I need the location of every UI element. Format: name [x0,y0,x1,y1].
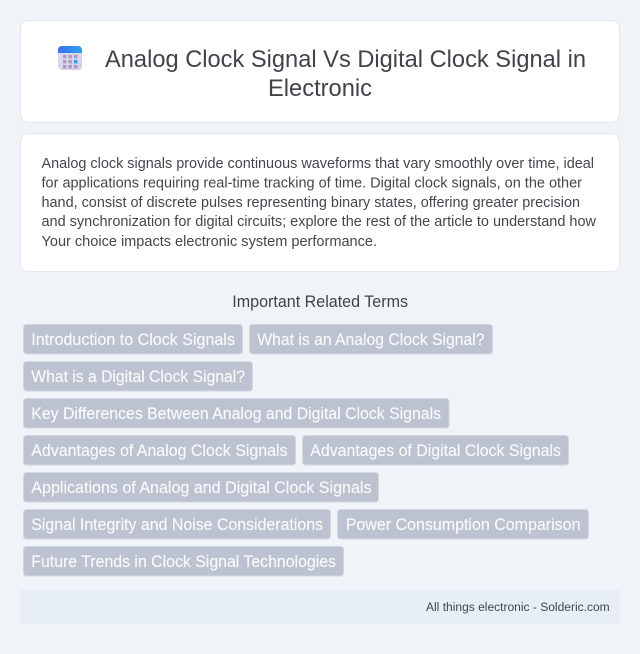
intro paragraph: Analog clock signals provide continuous waveforms that vary smoothly over time, ideal [42,156,594,172]
tag: future trends: Future Trends in Clock Signal Technologies [31,553,336,571]
tag: key differences: Key Differences Between Analog and Digital Clock Signals [31,405,441,423]
tag: signal integrity [24,510,330,539]
panel: title card [20,20,620,122]
icon: calendar [58,46,82,70]
tag: digital definition [24,362,252,391]
tag list [24,324,588,576]
footer [20,590,620,624]
title: Analog Clock Signal Vs Digital Clock Signal in [105,46,586,73]
tag: applications [24,472,378,502]
intro paragraph: for applications requiring real-time tracking of time. Digital clock signals, on the other [42,176,582,192]
tag: introduction [24,324,242,354]
tag: analog definition [250,324,492,354]
heading: important related terms: Important Related Terms [232,293,408,311]
intro paragraph: hand, consist of discrete pulses representing binary states, offering greater precision [42,195,580,211]
intro paragraph: Your choice impacts electronic system performance. [42,234,377,250]
tag: analog advantages: Advantages of Analog Clock Signals [31,442,288,460]
tag: signal integrity: Signal Integrity and Noise Considerations [31,516,323,534]
tag: future trends [24,546,344,576]
intro paragraph: and synchronization for digital circuits; explore the rest of the article to understand how [42,214,596,230]
tag: key differences [24,398,449,428]
tag: digital advantages: Advantages of Digital Clock Signals [310,442,561,460]
title: Electronic [268,75,372,102]
tag: introduction: Introduction to Clock Signals [31,331,235,349]
tag: power consumption: Power Consumption Comparison [346,516,580,534]
tag: power consumption [338,510,588,539]
tag: digital definition: What is a Digital Clock Signal? [31,368,245,386]
tag: digital advantages [302,436,568,465]
footer: All things electronic - Solderic.com [426,600,610,614]
intro paragraph [42,156,596,250]
title [105,46,586,102]
tag: analog advantages [24,436,296,465]
panel: intro text [20,134,620,272]
tag: analog definition: What is an Analog Clock Signal? [257,331,484,349]
tag: applications: Applications of Analog and Digital Clock Signals [31,479,372,497]
